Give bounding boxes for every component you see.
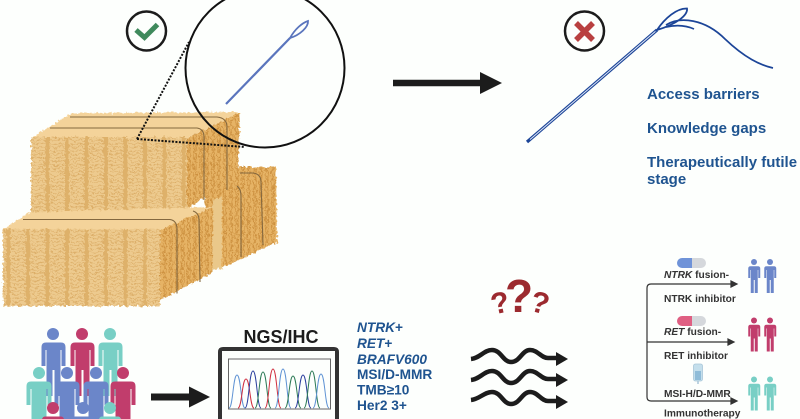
monitor chromatogram [218, 347, 339, 419]
biomarker list [357, 320, 432, 413]
question marks: ? [505, 270, 533, 322]
heading: NGS/IHC: NGS/IHC [243, 327, 319, 347]
magnifier with needle [137, 0, 344, 148]
question marks: ? [527, 285, 553, 322]
icon: IV bag [694, 364, 702, 384]
arrow: crowd to sequencing [151, 386, 210, 408]
icon: red pill [677, 316, 706, 326]
treatment labels: NTRK inhibitor [664, 294, 736, 305]
wavy arrows [471, 350, 568, 409]
text: barriers: stage [647, 171, 686, 188]
treatment labels [664, 270, 741, 419]
icon: threaded needle [527, 8, 773, 142]
icon: cross mark [565, 12, 604, 50]
treatment labels: MSI-H/D-MMR [664, 389, 731, 400]
bale: back right [205, 167, 277, 270]
text: barriers [647, 86, 797, 188]
icon: needle [226, 21, 308, 104]
icon: check mark [127, 12, 166, 50]
hay bales [2, 112, 277, 306]
biomarker list: NTRK+ [357, 320, 403, 335]
patient pair: blue [748, 259, 776, 293]
treatment labels: NTRK fusion- [664, 270, 729, 281]
text: barriers: Access barriers [647, 86, 760, 103]
treatment labels: RET fusion- [664, 327, 721, 338]
patient pair: red [748, 318, 776, 352]
treatment branching arrows [647, 281, 737, 404]
question marks [488, 270, 553, 322]
treatment labels: RET inhibitor [664, 351, 728, 362]
biomarker list: RET+ [357, 336, 392, 351]
icon: blue pill [677, 258, 706, 268]
patient pair: teal [748, 376, 776, 410]
arrow: main [393, 72, 502, 94]
text: barriers: Therapeutically futile [647, 154, 797, 171]
bale: bottom [2, 205, 213, 306]
bale: top [31, 112, 240, 213]
biomarker list: Her2 3+ [357, 398, 407, 413]
biomarker list: BRAFV600 [357, 352, 427, 367]
biomarker list: TMB≥10 [357, 382, 410, 398]
patient crowd [26, 328, 136, 419]
question marks: ? [488, 285, 512, 322]
biomarker list: MSI/D-MMR [357, 367, 432, 382]
text: barriers: Knowledge gaps [647, 120, 766, 137]
